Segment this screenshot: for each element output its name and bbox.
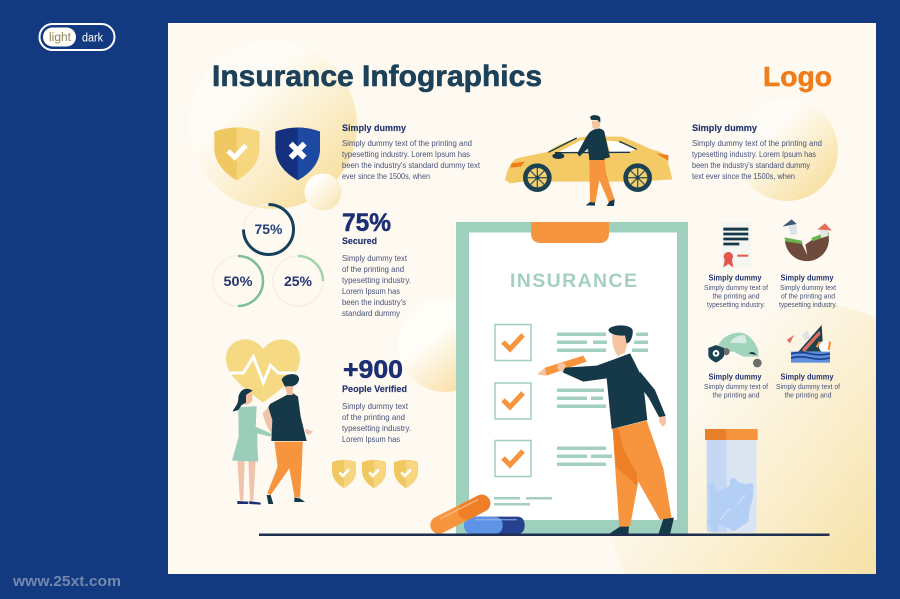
icons: three small check shields: [332, 460, 418, 488]
jar body: [707, 440, 757, 533]
jar lid: [705, 429, 758, 440]
title: Insurance Infographics: [212, 60, 542, 93]
text block: simply dummy right: text ever since the 1500s, when: [692, 172, 795, 181]
stat: 75% secured: been the industry's: [342, 298, 406, 307]
grid item: certificate: typesetting industry.: [707, 302, 765, 309]
car body: [505, 137, 672, 183]
icon: certificate: [722, 222, 752, 268]
heartbeat line: [229, 357, 295, 383]
grid item: flood: Simply dummy text of: [776, 384, 840, 391]
stat: 75% secured: Lorem Ipsum has: [342, 287, 400, 296]
woman hair: [233, 389, 253, 412]
man shoes: [608, 518, 674, 534]
donut: 50%: 50%: [224, 274, 252, 289]
text block: simply dummy right: been the industry's standard dummy: [692, 161, 810, 170]
caption: Simply dummy: [780, 274, 834, 282]
checkbox 1: [495, 324, 531, 360]
man sweater: [577, 129, 610, 160]
woman dress: [232, 406, 272, 462]
text block: simply dummy left: Simply dummy text of the printing and: [342, 139, 472, 148]
man shirt: [268, 392, 307, 441]
donut: 75%: [244, 204, 294, 254]
text block: simply dummy right: Simply dummy: [692, 123, 758, 134]
icon: damaged car: [708, 333, 762, 367]
toggle: light / dark: dark: [82, 32, 103, 44]
woman legs: [237, 461, 256, 501]
text block: simply dummy left: ever since the 1500s, when: [342, 172, 430, 181]
man head: [592, 121, 600, 129]
stat: +900 people verified: People Verified: [342, 384, 407, 395]
text block: simply dummy left: [342, 123, 481, 181]
checkbox 2: [495, 383, 531, 419]
donut: 25%: 25%: [284, 274, 312, 289]
clipboard clip: [531, 222, 609, 243]
man hair: [590, 115, 600, 123]
icon: navy cross shield: [275, 127, 320, 180]
panel: infographic card: [168, 23, 876, 574]
pencil tip: [537, 368, 547, 376]
man hair: [282, 374, 299, 387]
donut: 25%: [273, 256, 323, 306]
car trim: [548, 138, 637, 153]
man pants: [267, 442, 303, 498]
text block: simply dummy left: Simply dummy: [342, 123, 407, 134]
donut: 50%: [213, 256, 263, 306]
grid item: flood: the printing and: [784, 392, 832, 400]
stat: 75% secured: Simply dummy text: [342, 254, 408, 263]
grid item: earthquake: of the printing and: [781, 294, 835, 300]
man raised hand: [557, 363, 566, 371]
grid item: earthquake: Simply dummy text: [780, 285, 836, 292]
woman shoes: [237, 501, 261, 505]
clipboard: [456, 222, 688, 534]
stat: +900 people verified: Simply dummy text: [342, 402, 409, 411]
icon: earthquake: [782, 219, 832, 261]
woman face: [243, 393, 253, 405]
lid shade: [705, 429, 726, 440]
heart: [226, 339, 300, 403]
grid item: certificate: Simply dummy text of: [704, 285, 768, 292]
stat: 75% secured: standard dummy: [342, 309, 400, 318]
man back arm: [640, 372, 666, 417]
illustration: couple with heart: [226, 339, 313, 505]
donut: 75%: 75%: [254, 222, 282, 237]
stat: +900 people verified: typesetting industry.: [342, 424, 411, 433]
man hand: [305, 429, 313, 435]
checkbox 3: [495, 440, 531, 476]
caption: Simply dummy: [708, 372, 762, 382]
grid item: certificate: the printing and: [712, 294, 760, 300]
watermark: www.25xt.com: [12, 573, 121, 590]
man shoes: [267, 495, 305, 504]
illustration: man with yellow car: [505, 115, 672, 206]
caption: Simply dummy: [780, 372, 834, 382]
pills inside jar: [709, 480, 753, 528]
pills: [439, 499, 525, 534]
man hair: [608, 325, 633, 343]
man arm: [263, 407, 274, 436]
car lights and mirror: [511, 153, 668, 168]
car mirror: [552, 153, 564, 159]
text block: simply dummy right: typesetting industry. Lorem Ipsum has: [692, 150, 816, 159]
stat: +900 people verified: [342, 356, 411, 444]
icon: yellow check shield: [214, 127, 259, 180]
man shoes: [586, 199, 615, 206]
pencil: [537, 356, 587, 376]
stat: +900 people verified: +900: [343, 356, 403, 384]
text block: simply dummy right: Simply dummy text of the printing and: [692, 139, 822, 148]
toggle: light / dark: light: [49, 32, 72, 44]
jar shade: [707, 440, 727, 533]
caption: Simply dummy: [708, 274, 762, 282]
clipboard heading: INSURANCE: [510, 270, 637, 292]
stat: 75% secured: Secured: [342, 236, 377, 247]
man face: [284, 383, 293, 395]
logo: Logo: [763, 61, 832, 92]
text block: simply dummy left: been the industry's standard dummy text: [342, 161, 481, 170]
grid item: damaged car: [704, 333, 768, 400]
man sweater: [563, 353, 647, 429]
blue capsule: [464, 517, 525, 534]
stat: 75% secured: 75%: [342, 209, 391, 237]
man trousers: [613, 421, 672, 527]
text block: simply dummy left: typesetting industry. Lorem Ipsum has: [342, 150, 470, 159]
grid item: damaged car: Simply dummy text of: [704, 384, 768, 391]
man trousers: [589, 159, 615, 203]
grid item: earthquake: [779, 219, 837, 309]
stat: +900 people verified: of the printing and: [342, 413, 405, 422]
front wheel: [523, 163, 552, 192]
text block: simply dummy right: [692, 123, 822, 181]
orange capsule: [439, 499, 482, 525]
icon: flood: [787, 325, 831, 363]
grid item: flood: [776, 325, 840, 400]
pill jar: [705, 429, 758, 533]
stat: 75% secured: of the printing and: [342, 265, 404, 274]
man lowered hand: [659, 416, 666, 427]
ground line: [259, 534, 830, 536]
toggle: light / dark: [40, 24, 114, 50]
rear wheel: [623, 163, 652, 192]
stat: 75% secured: [342, 209, 411, 318]
checklist lines: [494, 332, 648, 506]
grid item: earthquake: typesetting industry.: [779, 302, 837, 309]
grid item: certificate: [704, 222, 768, 309]
man face: [612, 334, 627, 356]
stat: 75% secured: typesetting industry.: [342, 276, 411, 285]
car windows: [558, 140, 636, 152]
trouser shade: [613, 428, 637, 486]
grid item: damaged car: the printing and: [712, 392, 760, 400]
illustration: man with pencil: [537, 325, 674, 534]
stat: +900 people verified: Lorem Ipsum has: [342, 435, 400, 444]
